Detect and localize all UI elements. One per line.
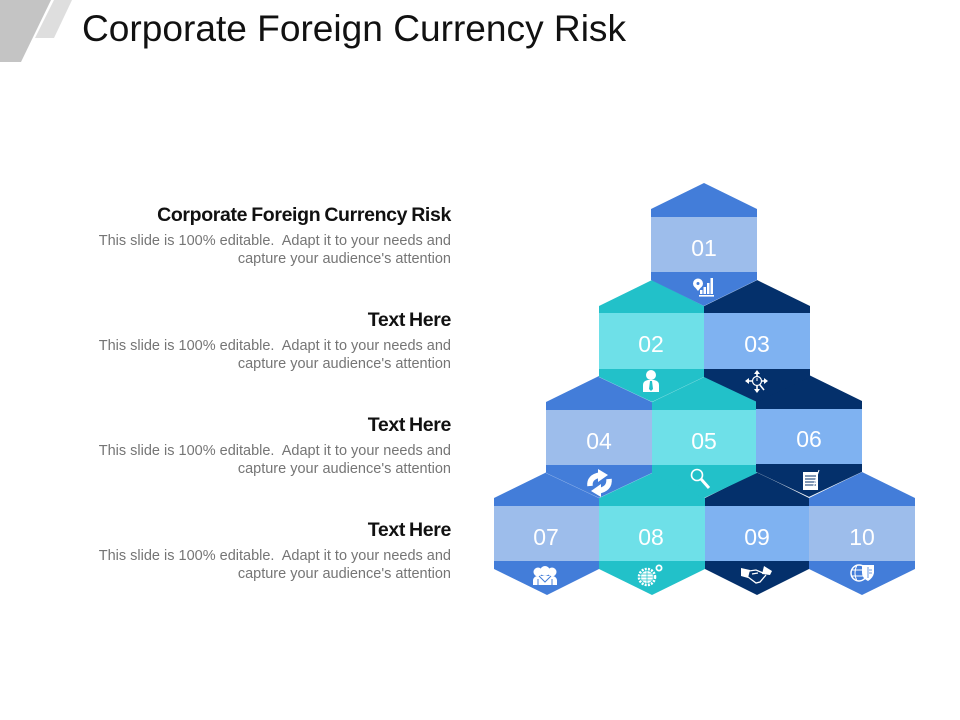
hexagon 04: [546, 376, 652, 498]
hexagon 09: [705, 472, 809, 595]
text block 1: Corporate Foreign Currency Risk: [157, 204, 451, 226]
icon: magnifying glass: [692, 470, 709, 488]
text block 4: capture your audience's attention: [238, 566, 451, 582]
hexagon 02: 02: [638, 331, 664, 357]
text block 3: [99, 414, 451, 477]
icon: bar chart with pin: [693, 278, 714, 297]
text block 2: capture your audience's attention: [238, 356, 451, 372]
hexagon 03: [704, 280, 810, 402]
icon: handshake: [741, 566, 772, 583]
text block 1: capture your audience's attention: [238, 251, 451, 267]
decorative corner shapes: [0, 0, 72, 62]
text block 2: [99, 309, 451, 372]
text block 1: [99, 204, 452, 267]
hexagon 09: 09: [744, 524, 770, 550]
text block 4: Text Here: [368, 519, 451, 541]
hexagon 03: 03: [744, 331, 770, 357]
icon: globe with shield: [851, 565, 874, 581]
title: Corporate Foreign Currency Risk: [82, 7, 626, 49]
icon: refresh arrows: [590, 469, 609, 497]
hexagon 05: [652, 376, 757, 498]
text block 2: Text Here: [368, 309, 451, 331]
text block 4: This slide is 100% editable. Adapt it to your needs and: [99, 548, 451, 564]
hexagon 05: 05: [691, 428, 717, 454]
hexagon 06: 06: [796, 426, 822, 452]
icon: gears: [639, 565, 662, 585]
hexagon 04: 04: [586, 428, 612, 454]
text block 3: capture your audience's attention: [238, 461, 451, 477]
hexagon 07: 07: [533, 524, 559, 550]
hexagon 01: [651, 183, 757, 306]
text block 1: This slide is 100% editable. Adapt it to your needs and: [99, 233, 451, 249]
icon: businessman: [643, 370, 659, 392]
hexagon 07: [494, 472, 599, 595]
text block 3: This slide is 100% editable. Adapt it to your needs and: [99, 443, 451, 459]
hexagon 10: [809, 472, 915, 595]
text block 2: This slide is 100% editable. Adapt it to your needs and: [99, 338, 451, 354]
hexagon 08: [599, 472, 705, 595]
hexagon 01: 01: [691, 235, 717, 261]
icon: team: [533, 566, 557, 585]
hexagon 02: [599, 280, 704, 402]
hexagon 10: 10: [849, 524, 875, 550]
text block 4: [99, 519, 451, 582]
hexagon 06: [756, 375, 862, 497]
icon: clock with arrows: [745, 370, 768, 393]
icon: notepad: [803, 470, 819, 490]
hexagon 08: 08: [638, 524, 664, 550]
text block 3: Text Here: [368, 414, 451, 436]
